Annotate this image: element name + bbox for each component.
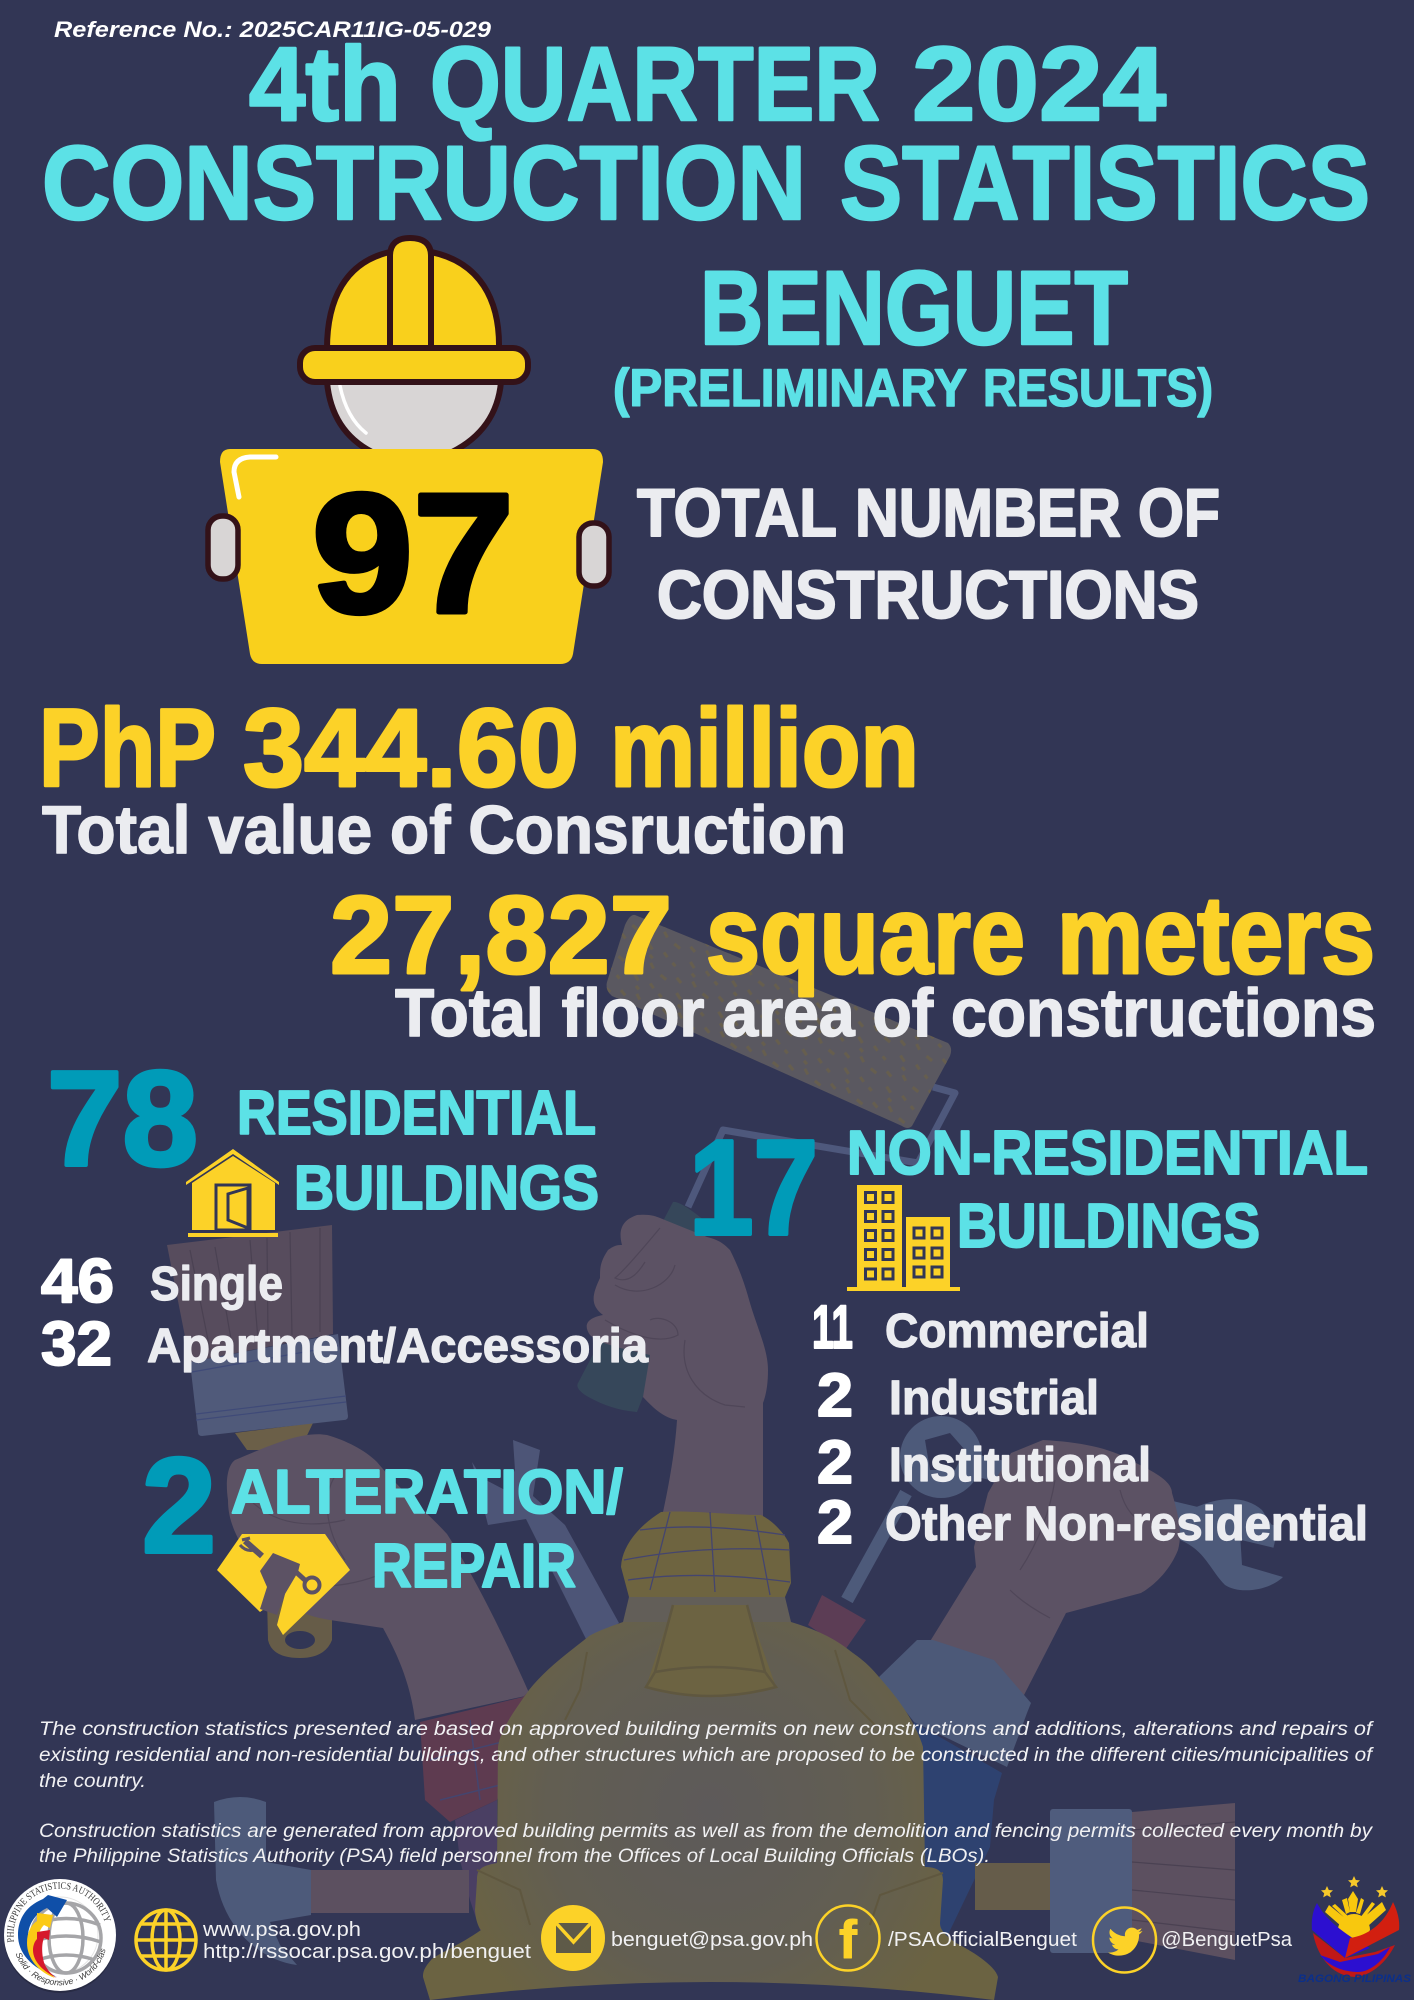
notes: methodology text: existing residential and non-residential buildings, and other structures which are proposed to be constructed in the different cities/municipalities of [39, 1745, 1374, 1766]
stat: total floor area [330, 874, 1376, 1051]
twitter handle: @BenguetPsa [1161, 1929, 1293, 1951]
single count: Single [150, 1258, 283, 1311]
icon: twitter [1093, 1908, 1156, 1972]
website links [202, 1919, 531, 1963]
institutional count: Institutional [889, 1439, 1151, 1492]
paint brush and left fist handle [167, 1225, 348, 1658]
left wrench [472, 1440, 619, 1643]
total number of constructions label: NUMBER [855, 475, 1121, 551]
title [42, 26, 1370, 242]
email address: benguet@psa.gov.ph [611, 1929, 813, 1951]
other non-residential count: Other Non-residential [885, 1498, 1368, 1551]
stat: total value: 344.60 [243, 687, 579, 810]
helmet dome [300, 238, 528, 452]
non-residential heading [847, 1119, 1368, 1261]
website links: www.psa.gov.ph [202, 1919, 361, 1941]
stat: total floor area: Total floor area of constructions [395, 975, 1376, 1051]
institutional count: 2 [817, 1428, 853, 1496]
title: 4th [249, 26, 401, 143]
single count: 46 [41, 1247, 114, 1316]
stat: total value: Total value of Consruction [42, 792, 846, 868]
facebook handle: /PSAOfficialBenguet [888, 1929, 1077, 1951]
other non-residential count: 2 [817, 1488, 853, 1556]
center hard hat [423, 1605, 998, 2000]
alteration heading [231, 1458, 623, 1601]
apartment count: 32 [41, 1310, 112, 1379]
panel: non-residential buildings [689, 1112, 1368, 1556]
total number of constructions label: TOTAL [637, 475, 837, 551]
stat: total value [39, 687, 919, 868]
website links: http://rssocar.psa.gov.ph/benguet [203, 1941, 531, 1963]
stat: total floor area: meters [1057, 874, 1375, 997]
background illustration: raised hands with tools [167, 915, 1283, 2000]
single count [41, 1247, 283, 1316]
right tools: ring spanner and screwdriver [808, 1416, 1283, 1650]
value: 2: 2 [142, 1430, 216, 1581]
icon: worker with hard hat holding sign showing 97 [208, 238, 609, 664]
right arm with fist and sleeve [879, 1440, 1180, 1943]
commercial count: 11 [812, 1293, 853, 1361]
stat: total value: million [610, 687, 919, 810]
residential heading: RESIDENTIAL [237, 1079, 596, 1148]
title: 2024 [912, 26, 1166, 143]
icon: fist holding wrench [217, 1534, 350, 1635]
industrial count: Industrial [889, 1372, 1099, 1425]
notes: methodology text: Construction statistics are generated from approved building permits as well as from the demolition and fencing permits collected every month by [39, 1821, 1374, 1842]
icon: facebook [816, 1906, 880, 1970]
center arm with fist and cuff [587, 1215, 791, 1622]
stat: total floor area: square [706, 874, 1025, 997]
apartment count: Apartment/Accessoria [147, 1320, 648, 1373]
residential heading [237, 1079, 599, 1223]
institutional count [817, 1428, 1151, 1496]
icon: office buildings [847, 1185, 960, 1291]
logo: Bagong Pilipinas: BAGONG PILIPINAS [1298, 1973, 1412, 1985]
preliminary results subtitle: RESULTS) [983, 359, 1213, 418]
residential heading: BUILDINGS [294, 1154, 599, 1223]
bottom-right brush [975, 1803, 1235, 1960]
logo: Philippine Statistics Authority seal: Solid · Responsive · World-class [16, 1948, 106, 1986]
notes: methodology text [39, 1719, 1374, 1867]
total number of constructions label: CONSTRUCTIONS [657, 557, 1199, 633]
total number of constructions label [637, 475, 1220, 633]
apartment count [41, 1310, 648, 1379]
other non-residential count [817, 1488, 1368, 1556]
alteration heading: REPAIR [372, 1532, 576, 1601]
title: QUARTER [430, 26, 880, 143]
bottom-left hammer [214, 1797, 469, 1965]
commercial count [812, 1293, 1149, 1361]
icon: email [541, 1905, 605, 1971]
notes: methodology text: the Philippine Statistics Authority (PSA) field personnel from the Offices of Local Building Officials (LBOs). [39, 1846, 990, 1867]
left arm with fist [227, 1434, 530, 1930]
panel: alteration and repair [142, 1430, 623, 1635]
value: 17: 17 [689, 1112, 818, 1263]
industrial count [817, 1361, 1099, 1429]
logo: Philippine Statistics Authority seal: PHILIPPINE STATISTICS AUTHORITY [6, 1882, 111, 1942]
paint roller [577, 915, 955, 1412]
stat: total value: PhP [39, 687, 216, 810]
logo: Philippine Statistics Authority seal [4, 1879, 116, 1993]
left hand [208, 516, 238, 579]
industrial count: 2 [817, 1361, 853, 1429]
value: 78: 78 [47, 1043, 198, 1194]
icon: globe [136, 1910, 196, 1970]
logo: Bagong Pilipinas [1298, 1876, 1412, 1985]
preliminary results subtitle [613, 359, 1213, 418]
reference number: Reference No.: 2025CAR11IG-05-029 [54, 17, 492, 42]
yellow sign [220, 449, 603, 664]
preliminary results subtitle: (PRELIMINARY [613, 359, 967, 418]
stat: total floor area: 27,827 [330, 874, 672, 997]
total number of constructions label: OF [1138, 475, 1220, 551]
panel: residential buildings [41, 1043, 648, 1379]
right hand [579, 523, 609, 586]
province heading: BENGUET [700, 250, 1128, 367]
icon: facebook: f [839, 1910, 858, 1970]
non-residential heading: BUILDINGS [957, 1192, 1260, 1261]
value: 97: 97 [312, 459, 514, 649]
non-residential heading: NON-RESIDENTIAL [847, 1119, 1368, 1188]
commercial count: Commercial [885, 1305, 1149, 1358]
icon: house [186, 1149, 279, 1237]
alteration heading: ALTERATION/ [231, 1458, 623, 1527]
notes: methodology text: The construction statistics presented are based on approved building permits on new constructions and additions, alterations and repairs of [39, 1719, 1374, 1740]
title: CONSTRUCTION [42, 125, 806, 242]
notes: methodology text: the country. [39, 1771, 146, 1792]
